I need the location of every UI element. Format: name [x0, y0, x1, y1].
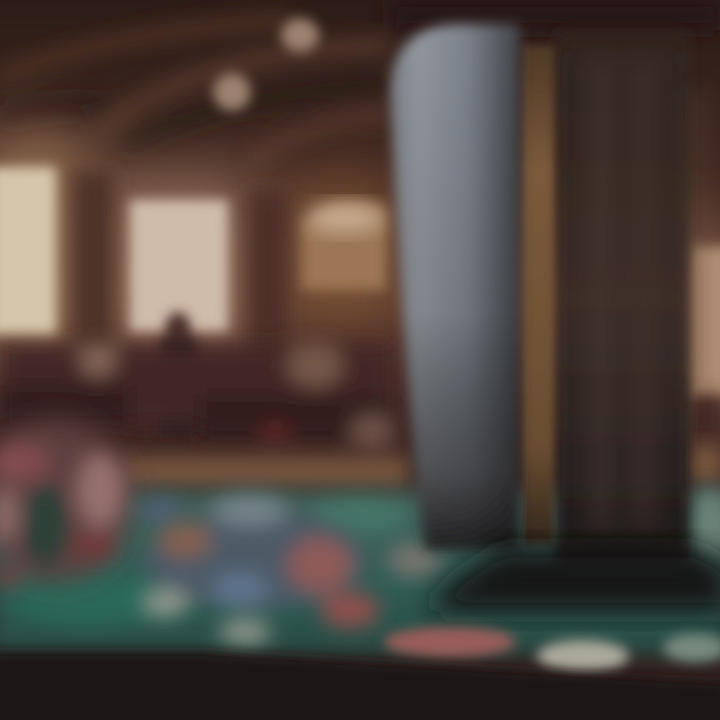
columns between windows [72, 170, 288, 370]
window glow halos [0, 130, 720, 420]
right felt patch [690, 489, 720, 561]
table front edge [0, 652, 720, 720]
silver cylinder [390, 24, 520, 550]
windows [0, 167, 720, 397]
gold stripe [522, 45, 554, 545]
silhouette figure [160, 312, 198, 435]
chips front [384, 627, 720, 672]
chips pile left [0, 420, 130, 580]
bright upper arch of third window [307, 203, 383, 233]
room furniture band [0, 343, 720, 450]
ceiling beams [0, 0, 720, 160]
scattered chips centre [141, 495, 443, 645]
tower texture columns [590, 60, 704, 530]
green felt [0, 490, 720, 655]
dark tower [555, 30, 690, 570]
table wood edge [120, 445, 720, 489]
ceiling lights [213, 18, 319, 111]
shadow at tower base [430, 548, 720, 612]
